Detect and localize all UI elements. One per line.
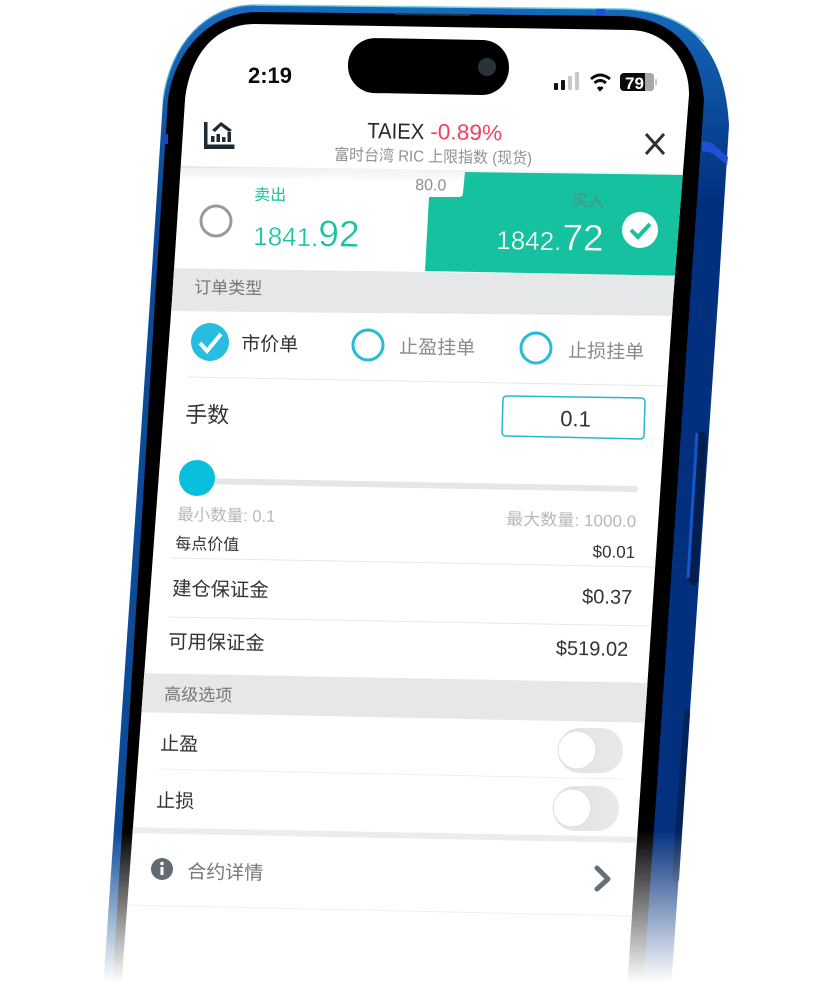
dynamic island: [348, 38, 509, 95]
icon: chart: [204, 122, 234, 149]
row: value per point: $0.01: [592, 542, 635, 562]
title: -0.89%: [430, 119, 502, 145]
option: stop loss order: 止损挂单: [568, 340, 644, 363]
panel: sell: [200, 186, 358, 247]
slider max: 最大数量: 1000.0: [506, 510, 636, 531]
panel: buy: [425, 172, 690, 276]
row: free margin: $519.02: [556, 638, 628, 661]
row: value per point: [176, 536, 634, 558]
section heading: order type: [160, 268, 690, 316]
row: initial margin: $0.37: [582, 586, 632, 609]
phone screen: [122, 24, 690, 978]
status bar time: 2:19: [248, 63, 292, 88]
panel: sell: 卖出: [254, 186, 286, 205]
phone mockup: [104, 4, 729, 978]
row: free margin: [169, 632, 628, 656]
row: take profit: 止盈: [160, 733, 198, 756]
spread tag: 80.0: [415, 177, 447, 195]
panel: sell: 92: [318, 213, 360, 255]
slider: [179, 460, 635, 496]
row: free margin: 可用保证金: [168, 631, 265, 655]
title: TAIEX: [367, 118, 425, 144]
row: contract details: [151, 858, 608, 889]
row: contract details: 合约详情: [187, 861, 263, 884]
row: stop loss: [156, 786, 619, 831]
lots input: 0.1: [560, 406, 591, 432]
lots input: [502, 396, 645, 439]
section heading: advanced: 高级选项: [164, 685, 232, 705]
row: take profit: [160, 728, 623, 773]
slider min: 最小数量: 0.1: [177, 505, 275, 526]
section heading: advanced: [130, 673, 660, 723]
panel: buy: 买入: [572, 192, 604, 211]
option: market order: 市价单: [241, 333, 298, 356]
header shadow: [170, 166, 690, 184]
option: take profit order: 止盈挂单: [399, 336, 475, 359]
icon: battery: 79: [625, 74, 644, 93]
panel: buy: 72: [562, 217, 604, 259]
panel: sell: 1841.: [253, 221, 319, 252]
option: take profit order: [353, 330, 475, 360]
row: initial margin: 建仓保证金: [172, 578, 269, 602]
lots label: 手数: [185, 402, 229, 428]
panel: buy: 1842.: [496, 225, 562, 256]
icon: battery: [620, 73, 657, 91]
title: [368, 122, 502, 140]
row: stop loss: 止损: [156, 790, 194, 813]
section heading: order type: 订单类型: [194, 278, 262, 298]
option: stop loss order: [521, 333, 644, 363]
row: value per point: 每点价值: [175, 535, 239, 554]
subtitle: 富时台湾 RIC 上限指数 (现货): [334, 146, 532, 168]
icon: close: [646, 134, 664, 154]
icon: wifi: [591, 75, 610, 90]
option: market order: [191, 323, 298, 361]
icon: signal: [554, 72, 579, 90]
row: initial margin: [172, 579, 632, 604]
